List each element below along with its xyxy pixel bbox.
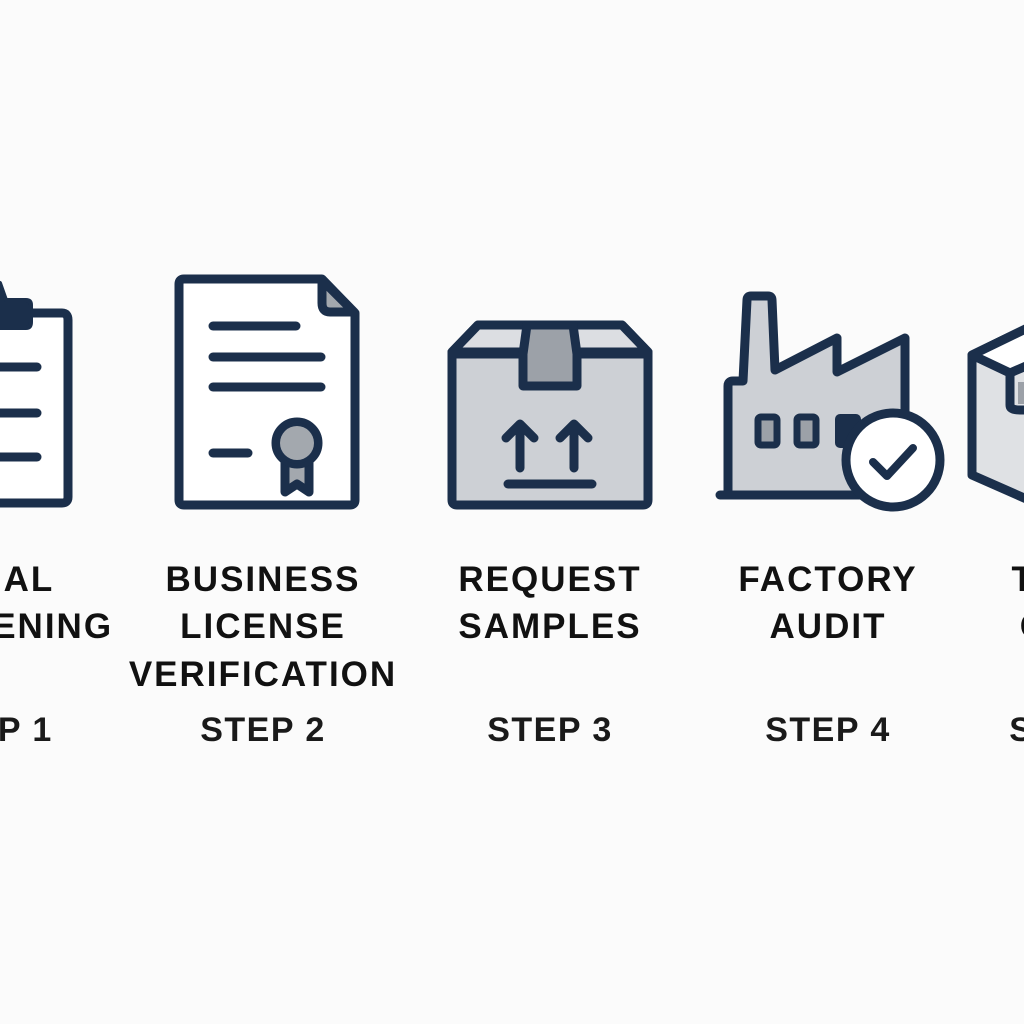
label: step 3: STEP 3 [487,711,613,749]
label: step 2 [129,560,397,749]
label: step 4: STEP 4 [765,711,891,749]
icon: clipboard (step 1) [0,283,68,503]
label: step 4 [738,560,918,749]
label: step 3: SAMPLES [458,607,642,646]
icon: factory with check (step 4) [720,296,940,507]
label: step 4: AUDIT [770,607,886,646]
icon: sample box (step 3) [452,325,648,505]
icon: business license document (step 2) [179,279,355,505]
label: step 5 [1009,560,1024,749]
label: step 2: BUSINESS [166,560,360,599]
label: step 2: VERIFICATION [129,655,397,694]
label: step 2: STEP 2 [200,711,326,749]
label: step 2: LICENSE [180,607,346,646]
label: step 1 [0,560,113,749]
label: step 4: FACTORY [738,560,918,599]
label: step 3: REQUEST [458,560,642,599]
label: step 3 [458,560,642,749]
icon: trial order box (step 5, cropped) [972,322,1024,505]
